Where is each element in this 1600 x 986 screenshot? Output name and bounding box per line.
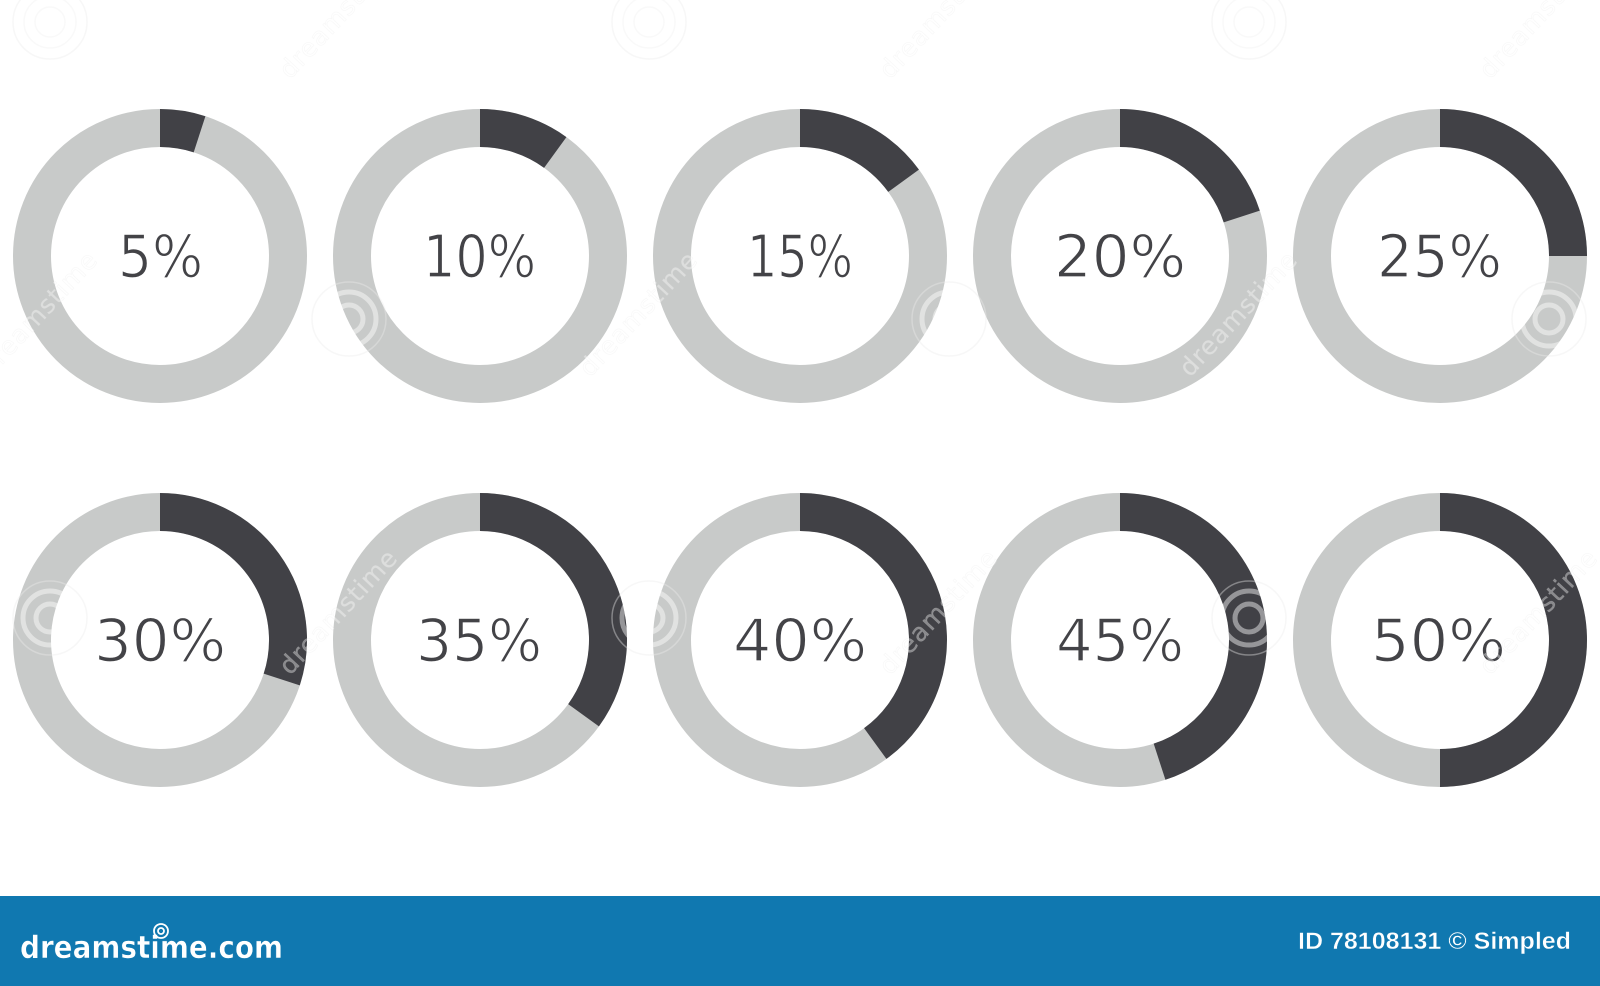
- donut: 35%: [352, 512, 608, 768]
- donut: 40%: [672, 512, 928, 768]
- donut: 30%: [32, 512, 288, 768]
- donut: 25%: [1312, 128, 1568, 384]
- donut: 5%: 5%: [118, 222, 203, 291]
- logo spiral icon: [154, 924, 168, 938]
- donut: 45%: [992, 512, 1248, 768]
- footer bar: [0, 896, 1600, 986]
- donut: 40%: 40%: [733, 606, 867, 675]
- donut: 15%: [672, 128, 928, 384]
- donut: 45%: 45%: [1056, 606, 1184, 675]
- donut: 50%: [1312, 512, 1568, 768]
- watermark spirals: [13, 0, 1586, 655]
- donut: 10%: 10%: [423, 222, 536, 291]
- donut: 20%: [992, 128, 1248, 384]
- watermark text: dreamstime: [273, 543, 404, 680]
- donut: 15%: 15%: [747, 222, 853, 291]
- logo wordmark: dreamstime.com: [20, 930, 283, 966]
- donut: 50%: 50%: [1371, 606, 1506, 675]
- donut: 35%: 35%: [416, 606, 542, 675]
- watermark text: dreamstime: [873, 543, 1004, 680]
- image credit: ID 78108131 © Simpled: [1298, 928, 1571, 955]
- donut: 30%: 30%: [94, 606, 226, 675]
- donut: 5%: [32, 128, 288, 384]
- watermark text: [0, 0, 1600, 680]
- donut: 25%: 25%: [1377, 222, 1502, 291]
- watermark text: dreamstime: [573, 245, 704, 382]
- donut: 10%: [352, 128, 608, 384]
- donut: 20%: 20%: [1054, 222, 1186, 291]
- watermark text: dreamstime: [1473, 543, 1600, 680]
- watermark text: dreamstime: [1173, 245, 1304, 382]
